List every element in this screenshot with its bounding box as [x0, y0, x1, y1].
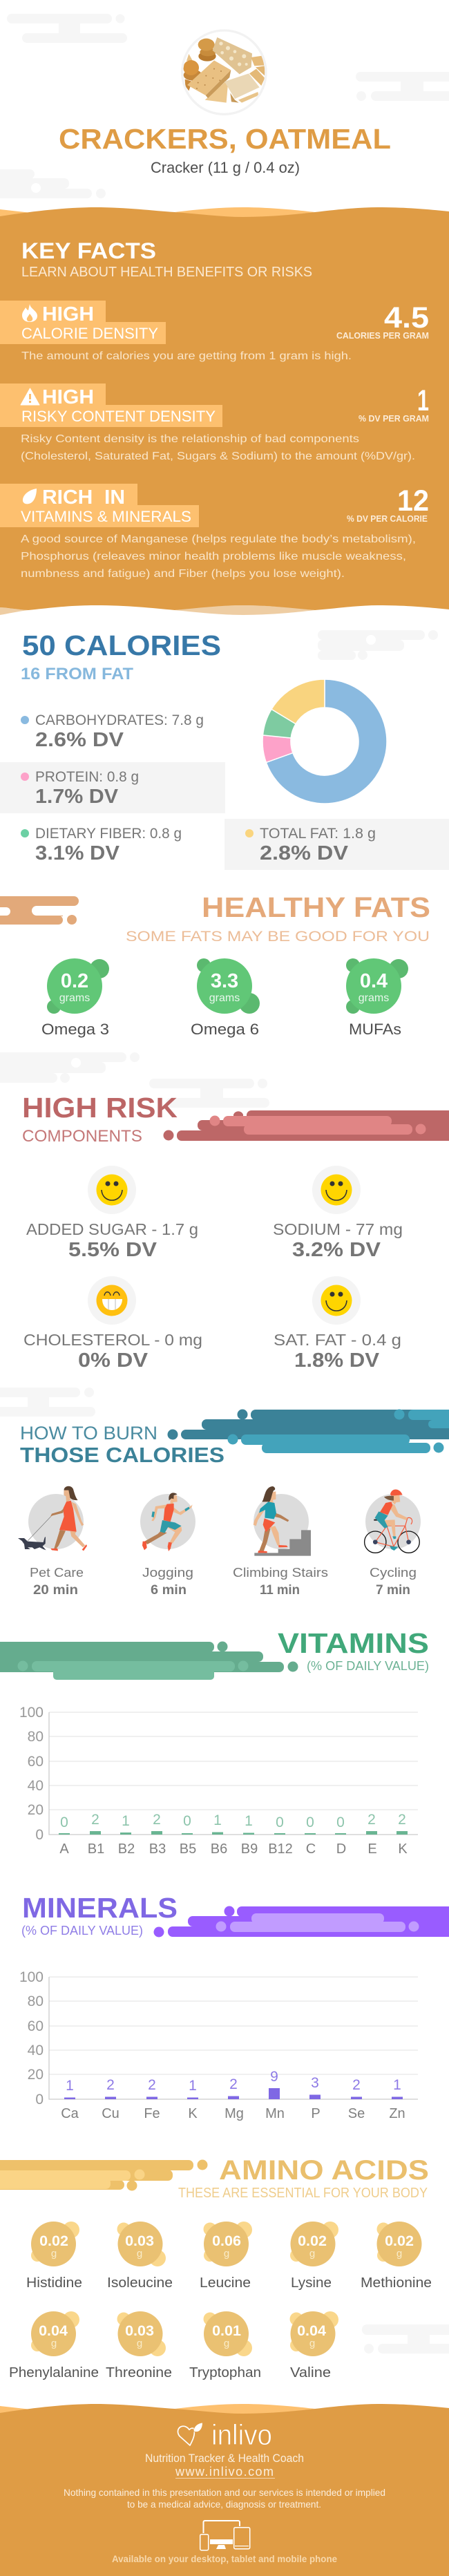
amino acid: leucine: 0.06	[212, 2233, 241, 2249]
amino acid: threonine: 0.03	[125, 2322, 154, 2339]
legend: total fat: TOTAL FAT: 1.8 g	[260, 826, 376, 842]
minerals bar chart: 1	[66, 2078, 74, 2094]
amino acid: tryptophan: 0.01	[212, 2322, 241, 2339]
minerals heading: MINERALS	[22, 1892, 178, 1924]
amino acid: leucine: g	[224, 2248, 229, 2260]
minerals bar chart: P	[311, 2106, 321, 2121]
minerals bar chart: 3	[311, 2075, 319, 2091]
high risk subheading: COMPONENTS	[22, 1127, 142, 1146]
vitamins bar chart: A	[59, 1841, 69, 1857]
vitamins bar chart: 0	[306, 1815, 314, 1830]
minerals bar chart: Se	[348, 2106, 365, 2121]
amino acid: lysine	[290, 2222, 338, 2291]
activity: pet care: Pet Care	[30, 1565, 84, 1580]
minerals bar chart: 0	[35, 2092, 44, 2108]
legend: protein: 1.7% DV	[35, 786, 119, 808]
vitamins bar chart: 1	[213, 1812, 222, 1828]
stat: percent DV per gram: 1	[417, 384, 429, 417]
panel: minerals	[19, 1892, 449, 2121]
amino acid: leucine	[200, 2222, 252, 2291]
activity: pet care	[18, 1486, 87, 1598]
risk item: added sugar: ADDED SUGAR - 1.7 g	[26, 1220, 198, 1238]
minerals bar chart: K	[188, 2106, 198, 2121]
vitamins ribbon	[0, 1642, 298, 1680]
badge: high calorie density: HIGH	[42, 303, 94, 325]
minerals bar chart: 80	[28, 1993, 44, 2009]
healthy fats subheading: SOME FATS MAY BE GOOD FOR YOU	[126, 929, 430, 945]
amino acid: methionine: 0.02	[385, 2233, 414, 2249]
illustration: runner	[142, 1493, 193, 1551]
text: vitamins and minerals description	[21, 533, 416, 580]
panel: calories	[0, 629, 449, 870]
icon: leaf	[23, 489, 37, 504]
text: vitamins and minerals description: numbness and fatigue) and Fiber (helps you lose weight).	[21, 568, 345, 580]
legend: carbohydrates: 2.6% DV	[35, 729, 124, 751]
fat badge: MUFAs: MUFAs	[349, 1021, 401, 1038]
wave band background	[0, 207, 449, 615]
activity: cycling: 7 min	[376, 1583, 410, 1598]
amino acid: phenylalanine: 0.04	[39, 2322, 68, 2339]
activity: cycling: Cycling	[370, 1565, 417, 1580]
vitamins bar chart: 80	[28, 1729, 44, 1745]
risk item: cholesterol	[23, 1276, 202, 1372]
badge: high calorie density	[0, 301, 166, 344]
risk item: saturated fat: SAT. FAT - 0.4 g	[274, 1331, 401, 1349]
fat badge: MUFAs: 0.4	[360, 970, 388, 992]
amino acid: valine: 0.04	[297, 2322, 326, 2339]
panel: amino acids	[0, 2155, 432, 2380]
risk item: sodium: SODIUM - 77 mg	[273, 1220, 403, 1238]
amino acid: threonine: g	[137, 2338, 142, 2349]
minerals bar chart: 1	[393, 2077, 401, 2093]
stat: percent DV per calorie: 12	[397, 484, 429, 518]
badge: rich in vitamins and minerals: VITAMINS & MINERALS	[21, 508, 191, 525]
amino acid: lysine: g	[309, 2248, 315, 2260]
vitamins bar chart: 20	[28, 1802, 44, 1818]
minerals bar chart: 20	[28, 2067, 44, 2083]
burn heading line 1: HOW TO BURN	[20, 1423, 157, 1443]
amino acid: tryptophan: g	[224, 2338, 229, 2349]
minerals bar chart: Ca	[61, 2106, 79, 2121]
activity: climbing stairs: Climbing Stairs	[233, 1565, 328, 1580]
icon: warning triangle	[21, 388, 39, 405]
amino acid: valine: Valine	[290, 2365, 331, 2380]
text: risky content description: (Cholesterol, Saturated Fat, Sugars & Sodium) to the amount (%DV/gr).	[21, 451, 415, 462]
stat: calories per gram	[336, 301, 429, 341]
vitamins bar chart: B9	[241, 1841, 258, 1857]
activity: climbing stairs	[233, 1486, 328, 1598]
vitamins bar chart: K	[398, 1841, 408, 1857]
risk item: saturated fat: 1.8% DV	[294, 1349, 380, 1372]
minerals bar chart: Mn	[265, 2106, 285, 2121]
vitamins bar chart: 0	[60, 1815, 68, 1830]
text: risky content description: Risky Content density is the relationship of bad components	[21, 433, 359, 445]
legend: dietary fiber	[21, 826, 182, 864]
donut chart	[262, 679, 387, 804]
minerals bar chart: 2	[352, 2077, 361, 2093]
vitamins bar chart: 2	[153, 1812, 161, 1828]
legend: dietary fiber: DIETARY FIBER: 0.8 g	[35, 826, 182, 842]
vitamins bar chart: 2	[91, 1812, 99, 1828]
fat badge: MUFAs: grams	[359, 992, 389, 1004]
minerals bar chart: 2	[148, 2077, 156, 2093]
vitamins bar chart: 100	[19, 1705, 44, 1721]
tagline: Nutrition Tracker & Health Coach	[145, 2452, 304, 2465]
serving size: Cracker (11 g / 0.4 oz)	[151, 159, 300, 176]
badge: rich in vitamins and minerals: RICH IN	[42, 486, 125, 509]
disclaimer	[64, 2487, 385, 2510]
legend: carbohydrates: CARBOHYDRATES: 7.8 g	[35, 712, 204, 728]
amino acids subheading: THESE ARE ESSENTIAL FOR YOUR BODY	[178, 2186, 428, 2201]
badge: high calorie density: CALORIE DENSITY	[21, 325, 158, 342]
healthy fats heading: HEALTHY FATS	[202, 891, 430, 923]
key facts heading: KEY FACTS	[21, 238, 156, 263]
amino acid: histidine: g	[51, 2248, 57, 2260]
activity: jogging	[140, 1493, 195, 1598]
legend: protein	[0, 762, 225, 813]
minerals bar chart: Zn	[389, 2106, 405, 2121]
panel: high risk components	[22, 1092, 449, 1372]
amino acid: threonine: Threonine	[106, 2365, 172, 2380]
fat badge: omega 3	[41, 958, 109, 1038]
risk item: cholesterol: CHOLESTEROL - 0 mg	[23, 1331, 202, 1349]
fat badge: omega 3: 0.2	[61, 970, 88, 992]
minerals ribbon	[153, 1906, 449, 1938]
stat: percent DV per calorie: % DV PER CALORIE	[347, 514, 428, 524]
text: vitamins and minerals description: A good source of Manganese (helps regulate the body’s metabolism),	[21, 533, 416, 545]
disclaimer: Nothing contained in this presentation and our services is intended or implied	[64, 2487, 385, 2498]
text: calorie density description: The amount of calories you are getting from 1 gram is high.	[21, 350, 352, 362]
vitamins bar chart: 0	[276, 1815, 284, 1830]
legend: dietary fiber: 3.1% DV	[35, 842, 120, 864]
legend: total fat: 2.8% DV	[260, 842, 349, 864]
activity: cycling	[365, 1489, 421, 1598]
burn ribbon	[167, 1410, 449, 1453]
footer wave background	[0, 2404, 449, 2576]
vitamins subheading: (% OF DAILY VALUE)	[307, 1659, 429, 1673]
amino acid: phenylalanine: g	[51, 2338, 57, 2349]
activity: climbing stairs: 11 min	[260, 1583, 300, 1598]
legend: carbohydrates	[21, 712, 204, 751]
website link: www.inlivo.com	[175, 2465, 274, 2479]
vitamins bar chart: 1	[122, 1813, 130, 1829]
fat badge: omega 3: grams	[59, 992, 90, 1004]
panel: footer	[0, 2404, 449, 2576]
amino acid: leucine: Leucine	[200, 2275, 251, 2291]
food image: crackers	[182, 30, 266, 114]
vitamins bar chart: 0	[183, 1813, 191, 1829]
illustration: cyclist	[365, 1489, 419, 1553]
high risk ribbon	[163, 1110, 449, 1141]
fat badge: omega 6: grams	[209, 992, 240, 1004]
vitamins bar chart: B1	[88, 1841, 104, 1857]
amino acid: threonine	[106, 2311, 172, 2380]
fat badge: MUFAs	[346, 958, 408, 1038]
disclaimer: to be a medical advice, diagnosis or treatment.	[127, 2499, 321, 2510]
minerals bar chart: Fe	[144, 2106, 160, 2121]
vitamins bar chart: D	[336, 1841, 346, 1857]
amino acid: phenylalanine: Phenylalanine	[9, 2365, 99, 2380]
amino acid: valine: g	[309, 2338, 315, 2349]
amino acid: tryptophan	[189, 2311, 261, 2380]
fat badge: omega 3: Omega 3	[41, 1021, 109, 1038]
amino acid: histidine: Histidine	[26, 2275, 82, 2291]
text: risky content description	[21, 433, 415, 462]
calories heading: 50 CALORIES	[22, 629, 221, 661]
minerals bar chart: Mg	[224, 2106, 244, 2121]
vitamins bar chart: B12	[268, 1841, 293, 1857]
text: vitamins and minerals description: Phosphorus (releaves minor health problems like muscle weakness,	[21, 551, 406, 562]
healthy fats ribbon	[0, 896, 79, 925]
badge: high risky content density: RISKY CONTENT DENSITY	[21, 408, 216, 425]
minerals bar chart: 100	[19, 1969, 44, 1985]
amino acids ribbon	[0, 2160, 207, 2190]
illustration: woman walking dog	[18, 1486, 87, 1551]
vitamins bar chart: 0	[336, 1815, 345, 1830]
minerals bar chart: 2	[106, 2077, 115, 2093]
minerals subheading: (% OF DAILY VALUE)	[21, 1924, 143, 1938]
vitamins bar chart: 0	[35, 1827, 44, 1843]
logo: inlivo	[178, 2418, 272, 2451]
vitamins bar chart: 2	[398, 1812, 406, 1828]
key facts subheading: LEARN ABOUT HEALTH BENEFITS OR RISKS	[21, 265, 312, 280]
amino acids heading: AMINO ACIDS	[219, 2155, 429, 2186]
stat: percent DV per gram	[359, 384, 429, 424]
burn heading line 2: THOSE CALORIES	[20, 1443, 224, 1467]
stat: calories per gram: 4.5	[384, 301, 429, 334]
amino acid: histidine: 0.02	[39, 2233, 68, 2249]
fat badge: omega 6	[191, 958, 260, 1038]
fat badge: omega 6: 3.3	[211, 970, 238, 992]
amino acid: lysine: Lysine	[291, 2275, 332, 2291]
vitamins bar chart: B6	[211, 1841, 227, 1857]
risk item: added sugar	[26, 1166, 198, 1261]
vitamins bar chart: B3	[149, 1841, 166, 1857]
vitamins heading: VITAMINS	[278, 1627, 429, 1659]
vitamins bar chart: 1	[245, 1813, 253, 1829]
high risk heading: HIGH RISK	[22, 1092, 178, 1124]
activity: jogging: 6 min	[151, 1583, 187, 1598]
panel: healthy fats	[0, 891, 430, 1038]
amino acid: lysine: 0.02	[298, 2233, 327, 2249]
vitamins bar chart: B5	[180, 1841, 196, 1857]
activity: pet care: 20 min	[33, 1583, 78, 1598]
minerals bar chart: 2	[229, 2076, 238, 2092]
legend: total fat	[224, 819, 449, 870]
minerals bar chart: 40	[28, 2043, 44, 2058]
stat: percent DV per gram: % DV PER GRAM	[359, 414, 429, 424]
activity: jogging: Jogging	[142, 1565, 193, 1580]
icon: flame	[22, 304, 37, 322]
icon: devices	[200, 2521, 250, 2550]
vitamins bar chart: 60	[28, 1754, 44, 1770]
amino acid: isoleucine: g	[137, 2248, 142, 2260]
risk item: sodium: 3.2% DV	[292, 1239, 381, 1261]
calories from fat: 16 FROM FAT	[21, 665, 133, 683]
vitamins bar chart: C	[306, 1841, 316, 1857]
amino acid: methionine	[361, 2222, 432, 2291]
vitamins bar chart: 2	[367, 1812, 376, 1828]
title: CRACKERS, OATMEAL	[59, 123, 391, 155]
stat: percent DV per calorie	[347, 484, 429, 524]
amino acid: isoleucine: Isoleucine	[107, 2275, 173, 2291]
illustration: woman on stairs	[254, 1486, 311, 1556]
panel: vitamins	[0, 1627, 429, 1857]
vitamins bar chart: E	[367, 1841, 377, 1857]
minerals bar chart: 1	[189, 2078, 197, 2094]
panel: how to burn calories	[18, 1410, 449, 1598]
logo: inlivo: inlivo	[211, 2418, 272, 2451]
minerals bar chart: 60	[28, 2018, 44, 2034]
badge: high risky content density: HIGH	[42, 386, 94, 408]
fat badge: omega 6: Omega 6	[191, 1021, 259, 1038]
amino acid: histidine	[26, 2222, 82, 2291]
amino acid: isoleucine	[107, 2222, 173, 2291]
badge: high risky content density	[0, 383, 222, 427]
minerals bar chart	[19, 1969, 418, 2121]
badge: rich in vitamins and minerals	[0, 484, 199, 527]
amino acid: methionine: g	[397, 2248, 402, 2260]
amino acid: phenylalanine	[9, 2311, 99, 2380]
legend: protein: PROTEIN: 0.8 g	[35, 769, 139, 785]
panel: key facts	[0, 207, 449, 615]
amino acid: methionine: Methionine	[361, 2275, 432, 2291]
risk item: sodium	[273, 1166, 403, 1261]
amino acid: valine	[290, 2311, 338, 2380]
vitamins bar chart	[19, 1705, 418, 1857]
risk item: added sugar: 5.5% DV	[68, 1239, 157, 1261]
minerals bar chart: 9	[270, 2069, 278, 2085]
availability note: Available on your desktop, tablet and mobile phone	[112, 2553, 337, 2564]
risk item: cholesterol: 0% DV	[78, 1349, 149, 1372]
risk item: saturated fat	[274, 1276, 401, 1372]
panel: food header	[59, 30, 391, 176]
amino acid: isoleucine: 0.03	[125, 2233, 154, 2249]
vitamins bar chart: B2	[118, 1841, 135, 1857]
stat: calories per gram: CALORIES PER GRAM	[336, 331, 429, 341]
vitamins bar chart: 40	[28, 1778, 44, 1794]
amino acid: tryptophan: Tryptophan	[189, 2365, 261, 2380]
minerals bar chart: Cu	[102, 2106, 120, 2121]
